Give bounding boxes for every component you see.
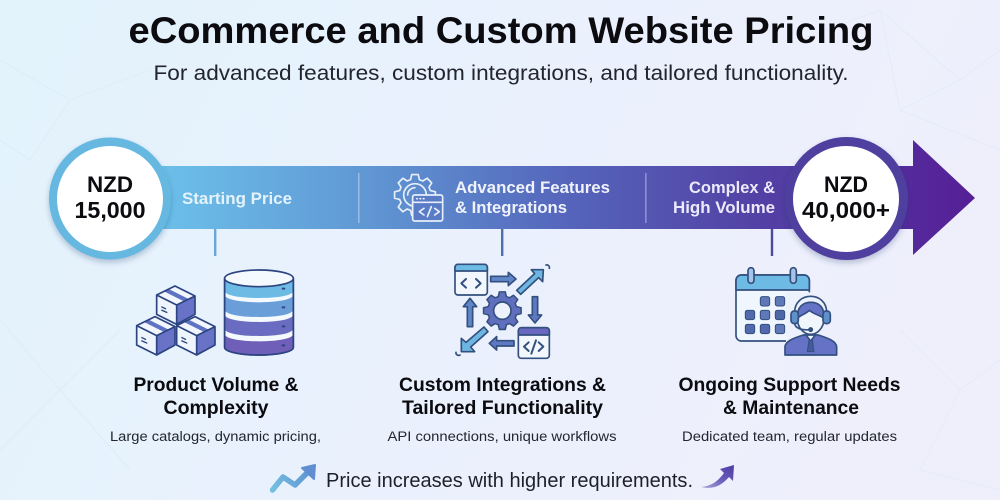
panel: custom integrations [388, 264, 617, 444]
heading: & Maintenance [723, 398, 859, 419]
description: Large catalogs, dynamic pricing, [110, 429, 321, 444]
heading: Tailored Functionality [402, 398, 603, 419]
starting price label: Starting Price [182, 190, 292, 208]
heading [399, 375, 606, 419]
heading: Custom Integrations & [399, 375, 606, 396]
heading: Complexity [164, 398, 269, 419]
heading: Product Volume & [134, 375, 299, 396]
advanced features label [455, 178, 610, 217]
arrow body [150, 140, 975, 255]
icon: integrations cycle [455, 264, 549, 358]
icon: rising trend arrow [272, 470, 310, 490]
icon: trend arrowhead [302, 465, 315, 479]
description: Dedicated team, regular updates [682, 429, 897, 444]
description: API connections, unique workflows [388, 429, 617, 444]
icon: gear and code window [395, 175, 443, 221]
heading [134, 375, 299, 419]
stem: advanced features [501, 229, 503, 256]
price badge: NZD 40,000+: NZD [824, 172, 868, 197]
complex and high volume label: Complex & [689, 178, 775, 197]
price badge: NZD 15,000: NZD [87, 172, 133, 197]
heading: Ongoing Support Needs [678, 375, 900, 396]
stem: complex and high volume [771, 229, 773, 256]
icon: calendar and support agent [736, 268, 837, 355]
advanced features label: & Integrations [455, 198, 567, 217]
panel: product volume [110, 270, 321, 444]
price badge: NZD 40,000+ [785, 137, 908, 260]
footer text: Price increases with higher requirements. [326, 470, 693, 492]
pricing arrow [49, 137, 975, 260]
complex and high volume label [673, 178, 775, 217]
icon: database [225, 270, 293, 355]
complex and high volume label: High Volume [673, 198, 775, 217]
stem: starting price [214, 229, 216, 256]
icon: swoosh arrow [701, 465, 734, 488]
price badge: NZD 15,000 [49, 138, 171, 260]
heading [678, 375, 900, 419]
price badge: NZD 40,000+: 40,000+ [802, 197, 890, 223]
footer note [272, 465, 734, 492]
panel: ongoing support [678, 268, 900, 444]
icon: boxes [137, 286, 215, 355]
subtitle: For advanced features, custom integrations, and tailored functionality. [154, 62, 848, 85]
price badge: NZD 15,000: 15,000 [74, 197, 146, 223]
advanced features label: Advanced Features [455, 178, 610, 197]
title: eCommerce and Custom Website Pricing [128, 10, 874, 51]
